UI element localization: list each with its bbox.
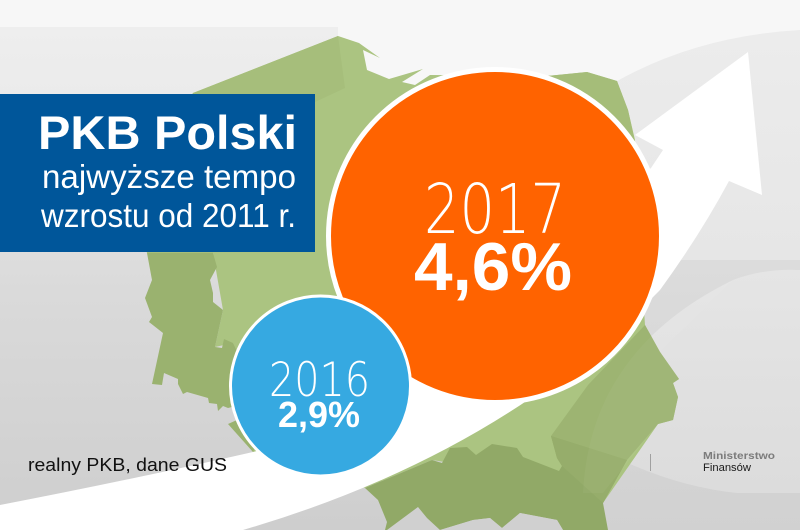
logo: Ministerstwo Finansów: Finansów (703, 462, 751, 474)
map: lower-east shade (551, 436, 627, 503)
map: east region (551, 325, 679, 460)
map: west region (145, 253, 260, 411)
map: overlay arc (583, 280, 733, 493)
value 2,9%: 2,9% (278, 394, 360, 435)
source note: realny PKB, dane GUS (28, 455, 227, 475)
map: north-east region (547, 72, 635, 142)
orange circle 2017 (328, 70, 662, 402)
map: south region (365, 436, 627, 530)
map: small west region (228, 420, 258, 452)
title box (0, 94, 315, 252)
logo: Ministerstwo Finansów: Ministerstwo (703, 450, 775, 462)
year 2017: 2017 (424, 170, 566, 250)
map: bottom background cut (387, 507, 563, 530)
map: central light region (147, 36, 679, 503)
year 2016: 2016 (269, 353, 370, 408)
title text: PKB Polski (38, 106, 297, 159)
value 4,6%: 4,6% (414, 229, 572, 305)
subtitle line 2: wzrostu od 2011 r. (40, 197, 296, 234)
subtitle line 1: najwyższe tempo (42, 158, 296, 195)
logo: Ministerstwo Finansów (650, 450, 775, 474)
blue circle 2016 (230, 296, 410, 476)
map: north-west region (130, 36, 345, 253)
map of Poland (130, 36, 733, 530)
